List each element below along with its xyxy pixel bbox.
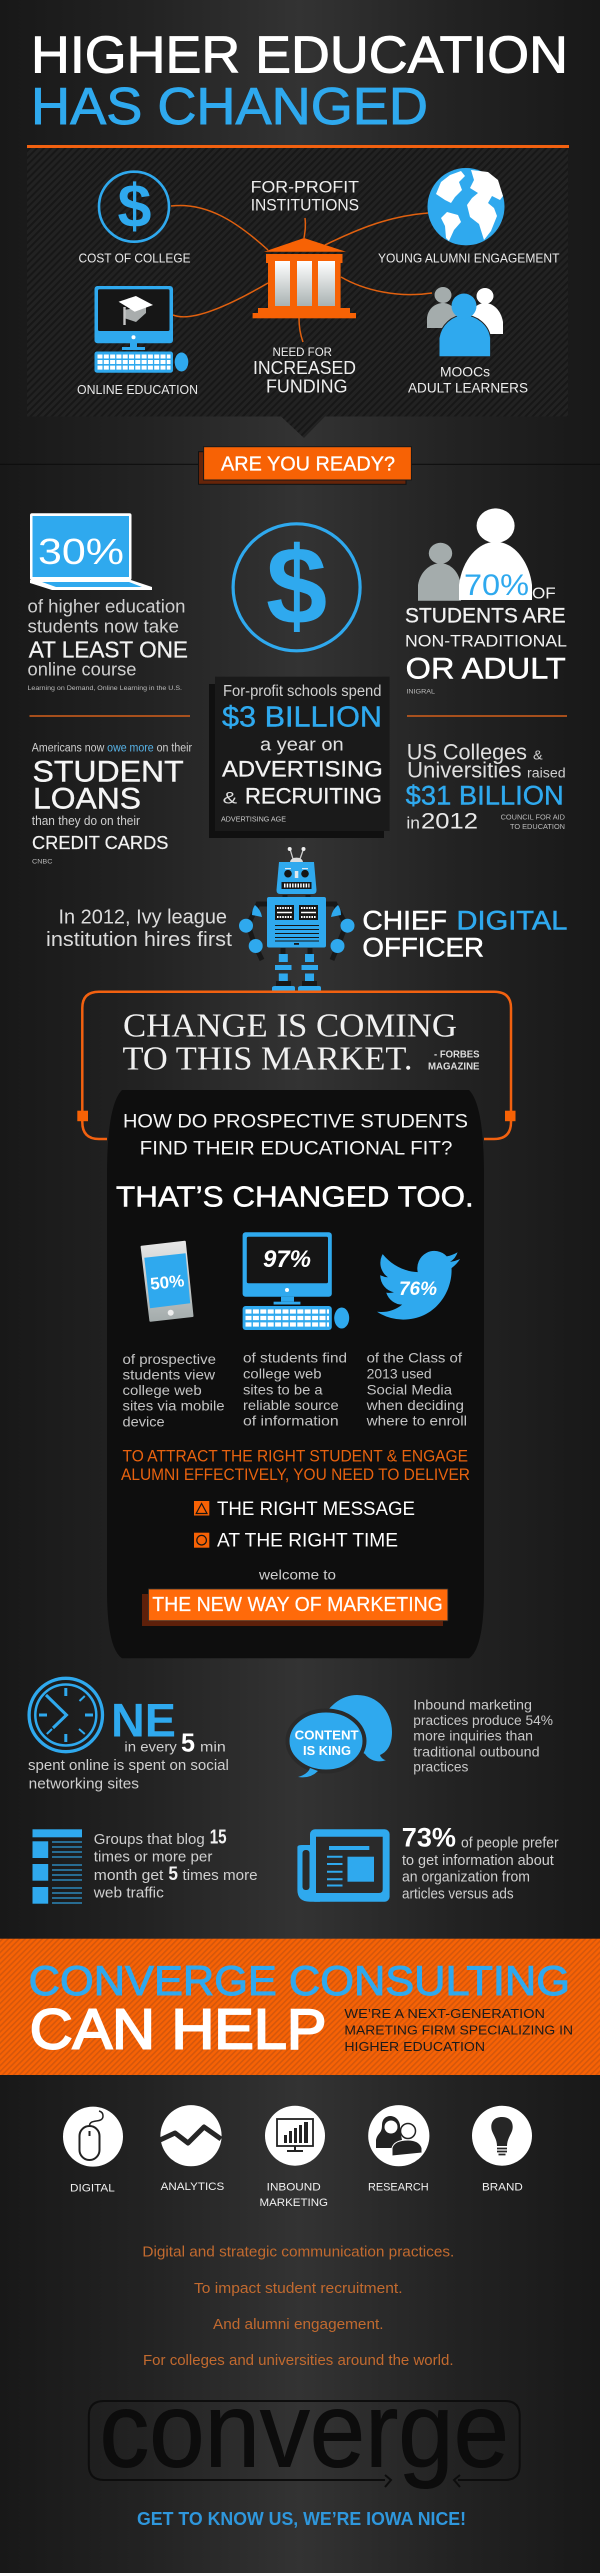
icon: message <box>194 1501 209 1516</box>
icon: monitor 97% <box>243 1232 349 1330</box>
stat: $31 billion raised: Universities <box>407 758 522 783</box>
stat: 73 percent articles: articles versus ads <box>402 1886 514 1902</box>
stat: 30 percent online course: of higher education <box>28 595 186 616</box>
icon: brand <box>472 2106 532 2166</box>
icon: newspaper <box>297 1829 390 1902</box>
stat: $31 billion raised: $31 BILLION <box>406 780 564 810</box>
label: for-profit institutions: INSTITUTIONS <box>251 196 359 215</box>
text: iowa nice: GET TO KNOW US, WE’RE IOWA NICE! <box>137 2509 466 2529</box>
stat: $31 billion raised <box>406 739 566 833</box>
text: web sites stat: reliable source <box>243 1397 339 1413</box>
panel: change is coming frame <box>77 992 516 1139</box>
text: ivy league: institution hires first <box>46 929 232 951</box>
label: cost of college: COST OF COLLEGE <box>78 251 191 266</box>
stat: $31 billion raised: & <box>533 747 543 762</box>
stat: blog groups: 5 <box>168 1864 178 1885</box>
stat: 70 percent non-traditional: 70% <box>464 569 529 602</box>
mortarboard <box>119 296 153 325</box>
panel: $3 billion: RECRUITING <box>245 783 382 808</box>
text: closing statements <box>142 2244 454 2369</box>
text: closing statements: Digital and strategic communication practices. <box>142 2244 454 2260</box>
text: inbound marketing: traditional outbound <box>413 1744 540 1760</box>
stat: student loans: CNBC <box>32 858 53 865</box>
text: inbound marketing: practices <box>413 1759 468 1775</box>
text: ivy league <box>46 906 232 951</box>
label: analytics: ANALYTICS <box>161 2181 224 2193</box>
text: social media stat: Social Media <box>367 1381 452 1397</box>
label: research: RESEARCH <box>368 2182 429 2194</box>
stat: student loans: CREDIT CARDS <box>32 833 168 853</box>
panel: $3 billion: ADVERTISING AGE <box>221 817 286 824</box>
panel: $3 billion: $3 BILLION <box>222 702 382 734</box>
callout: new way of marketing: THE NEW WAY OF MARKETING <box>152 1594 443 1616</box>
icon: robot <box>239 847 354 991</box>
icon: time <box>194 1533 209 1548</box>
text: chief digital officer <box>362 905 568 963</box>
heading: prospective students <box>123 1112 468 1159</box>
label: brand: BRAND <box>482 2182 523 2194</box>
label: inbound marketing <box>260 2182 328 2209</box>
stat: one in every five: min <box>200 1740 226 1755</box>
callout: are you ready: ARE YOU READY? <box>221 453 395 476</box>
stat: $31 billion raised: COUNCIL FOR AID <box>501 812 566 821</box>
stat: $31 billion raised: US Colleges <box>407 739 527 764</box>
text: inbound marketing: Inbound marketing <box>413 1696 532 1712</box>
title <box>31 26 568 136</box>
stat: student loans: LOANS <box>33 783 141 816</box>
panel: $3 billion: ADVERTISING <box>222 757 383 782</box>
stat: 30 percent online course: students now take <box>28 616 179 637</box>
panel: forces of change <box>27 145 569 438</box>
stat: 70 percent non-traditional: OF <box>532 585 556 602</box>
stat: one in every five: spent online is spent on social <box>28 1758 229 1774</box>
icon: phone 50% <box>142 1242 192 1321</box>
quote: change is coming <box>122 1008 480 1077</box>
icon: laptop: 30% <box>38 531 124 572</box>
icon: dollar: $ <box>118 172 152 240</box>
stat: one in every five: NE <box>111 1695 176 1748</box>
text: welcome to: welcome to <box>258 1566 336 1582</box>
icon: dollar <box>99 172 169 242</box>
icon: phone 50%: 50% <box>149 1271 185 1294</box>
label: for-profit institutions <box>251 177 359 215</box>
stat: 73 percent articles: 73% <box>402 1823 456 1853</box>
callout: new way of marketing <box>142 1589 448 1626</box>
icon: twitter 76% <box>377 1251 460 1320</box>
panel: $3 billion: a year on <box>260 735 344 755</box>
icon: laptop <box>30 513 152 590</box>
text: next-generation firm: HIGHER EDUCATION <box>344 2039 485 2054</box>
stat: student loans: STUDENT <box>32 756 184 789</box>
text: closing statements: To impact student recruitment. <box>194 2281 403 2297</box>
stat: 70 percent non-traditional: STUDENTS ARE <box>405 605 566 628</box>
title: HIGHER EDUCATION <box>31 26 568 84</box>
text: closing statements: And alumni engagement. <box>213 2317 384 2333</box>
label: digital: DIGITAL <box>70 2183 115 2195</box>
text: web sites stat: of information <box>243 1413 339 1429</box>
panel: converge consulting can help <box>0 1939 600 2075</box>
stat: $31 billion raised: TO EDUCATION <box>510 822 565 831</box>
text: chief digital officer: OFFICER <box>362 933 484 963</box>
stat: one in every five: 5 <box>181 1728 195 1758</box>
text: next-generation firm: MARETING FIRM SPECIALIZING IN <box>344 2022 573 2038</box>
text: mobile stat: device <box>122 1414 165 1430</box>
quote: change is coming: - FORBES <box>434 1049 480 1060</box>
label: online education: ONLINE EDUCATION <box>77 382 198 397</box>
label: need for increased funding: INCREASED <box>253 358 356 378</box>
text: web sites stat: college web <box>243 1366 322 1382</box>
heading: can help: CAN HELP <box>30 1997 326 2061</box>
text: inbound marketing: more inquiries than <box>413 1728 533 1744</box>
icon: large dollar <box>233 524 360 651</box>
title: HAS CHANGED <box>31 78 428 136</box>
icon: people pair <box>418 508 532 601</box>
text: closing statements: For colleges and universities around the world. <box>143 2353 454 2369</box>
text: the right message: THE RIGHT MESSAGE <box>217 1499 415 1520</box>
icon: speech bubbles: IS KING <box>303 1743 351 1758</box>
stat: 73 percent articles: an organization from <box>402 1870 530 1886</box>
icon: online computer <box>94 286 188 373</box>
text: mobile stat: sites via mobile <box>122 1398 225 1414</box>
stat: 70 percent non-traditional: OR ADULT <box>406 652 566 685</box>
icon: large dollar: $ <box>266 525 327 648</box>
text: mobile stat <box>122 1351 225 1430</box>
text: web sites stat: of students find <box>243 1350 347 1366</box>
label: need for increased funding: FUNDING <box>266 376 348 396</box>
panel: $3 billion: For-profit schools spend <box>223 683 382 700</box>
stat: student loans <box>32 743 192 865</box>
icon: people <box>427 287 503 357</box>
label: need for increased funding: NEED FOR <box>272 345 332 359</box>
text: attract the right student: TO ATTRACT THE RIGHT STUDENT & ENGAGE <box>122 1447 468 1466</box>
label: inbound marketing: INBOUND <box>267 2182 321 2194</box>
stat: 70 percent non-traditional <box>405 508 567 695</box>
quote: change is coming: TO THIS MARKET. <box>122 1040 412 1077</box>
text: next-generation firm: WE’RE A NEXT-GENERATION <box>344 2006 545 2021</box>
icon: digital <box>63 2107 123 2167</box>
heading: prospective students: FIND THEIR EDUCATIONAL FIT? <box>140 1138 452 1159</box>
panel: $3 billion: & <box>223 788 238 807</box>
icon: monitor 97%: 97% <box>263 1246 311 1273</box>
icon: clock <box>29 1678 102 1752</box>
icon: globe <box>428 168 504 245</box>
stat: blog groups: times or more per <box>94 1850 213 1866</box>
text: inbound marketing: practices produce 54% <box>413 1712 553 1728</box>
label: moocs adult learners <box>408 364 528 395</box>
icon: list <box>32 1829 82 1904</box>
stat: 70 percent non-traditional: INIGRAL <box>406 688 435 695</box>
label: need for increased funding <box>253 345 356 396</box>
label: young alumni engagement: YOUNG ALUMNI ENGAGEMENT <box>378 251 560 266</box>
text: web sites stat: sites to be a <box>243 1381 323 1397</box>
stat: 30 percent online course <box>28 513 188 692</box>
heading: converge consulting: CONVERGE CONSULTING <box>29 1957 570 2004</box>
stat: $31 billion raised: raised <box>527 766 566 781</box>
quote: change is coming: MAGAZINE <box>428 1061 480 1072</box>
text: chief digital officer: CHIEF <box>362 905 447 935</box>
stat: one in every five: networking sites <box>29 1776 139 1792</box>
stat: 73 percent articles <box>297 1823 559 1902</box>
stat: blog groups: web traffic <box>93 1886 164 1902</box>
panel: $3 billion <box>209 677 390 838</box>
callout: are you ready <box>198 447 411 484</box>
panel: dark educational fit <box>107 1090 484 1658</box>
text: mobile stat: college web <box>122 1382 202 1398</box>
stat: 30 percent online course: AT LEAST ONE <box>29 636 188 662</box>
text: attract the right student <box>121 1447 470 1484</box>
label: moocs adult learners: ADULT LEARNERS <box>408 379 528 395</box>
stat: student loans: Americans now owe more on their <box>32 743 192 755</box>
icon: research <box>368 2105 429 2166</box>
stat: student loans: than they do on their <box>32 814 140 828</box>
text: chief digital officer: DIGITAL <box>456 905 568 935</box>
text: at the right time: AT THE RIGHT TIME <box>217 1531 398 1552</box>
icon: twitter 76%: 76% <box>399 1279 437 1300</box>
label: moocs adult learners: MOOCs <box>440 364 490 380</box>
logo: converge: converge <box>100 2371 509 2489</box>
text: social media stat: 2013 used <box>367 1366 432 1382</box>
text: next-generation firm <box>344 2006 573 2054</box>
text: social media stat: of the Class of <box>367 1350 462 1366</box>
text: mobile stat: of prospective <box>122 1351 216 1367</box>
icon: speech bubbles: CONTENT <box>295 1727 359 1742</box>
text: social media stat: when deciding <box>366 1397 464 1413</box>
text: mobile stat: students view <box>122 1367 216 1383</box>
stat: blog groups <box>32 1826 258 1904</box>
icon: inbound marketing <box>265 2106 325 2166</box>
icon: speech bubbles <box>288 1695 392 1777</box>
stat: $31 billion raised: 2012 <box>421 808 478 833</box>
stat: 70 percent non-traditional: NON-TRADITIONAL <box>405 632 567 651</box>
stat: content is king <box>288 1695 553 1777</box>
text: ivy league: In 2012, Ivy league <box>58 906 227 928</box>
text: attract the right student: ALUMNI EFFECTIVELY, YOU NEED TO DELIVER <box>121 1465 470 1484</box>
quote: change is coming: CHANGE IS COMING <box>123 1008 457 1045</box>
stat: blog groups: Groups that blog <box>94 1832 205 1848</box>
stat: blog groups: 15 <box>210 1826 227 1848</box>
heading: prospective students: HOW DO PROSPECTIVE STUDENTS <box>123 1112 468 1133</box>
label: inbound marketing: MARKETING <box>260 2197 328 2209</box>
stat: 30 percent online course: online course <box>28 659 136 680</box>
stat: one in every five: in every <box>124 1740 177 1755</box>
icon: analytics <box>160 2105 222 2166</box>
stat: blog groups: month get <box>94 1868 163 1884</box>
stat: one in every five <box>28 1678 229 1792</box>
text: inbound marketing <box>413 1696 553 1775</box>
stat: blog groups: times more <box>182 1868 258 1884</box>
text: social media stat <box>366 1350 467 1429</box>
stat: 73 percent articles: to get information about <box>402 1853 554 1869</box>
stat: 30 percent online course: Learning on Demand, Online Learning in the U.S. <box>28 685 182 692</box>
text: web sites stat <box>243 1350 347 1429</box>
stat: 73 percent articles: of people prefer <box>461 1835 559 1851</box>
connector curves <box>171 205 432 342</box>
icon: institution <box>253 238 356 318</box>
heading: that's changed too: THAT’S CHANGED TOO. <box>116 1182 474 1214</box>
text: social media stat: where to enroll <box>366 1413 467 1429</box>
label: for-profit institutions: FOR-PROFIT <box>251 177 359 196</box>
stat: $31 billion raised: in <box>406 813 420 832</box>
